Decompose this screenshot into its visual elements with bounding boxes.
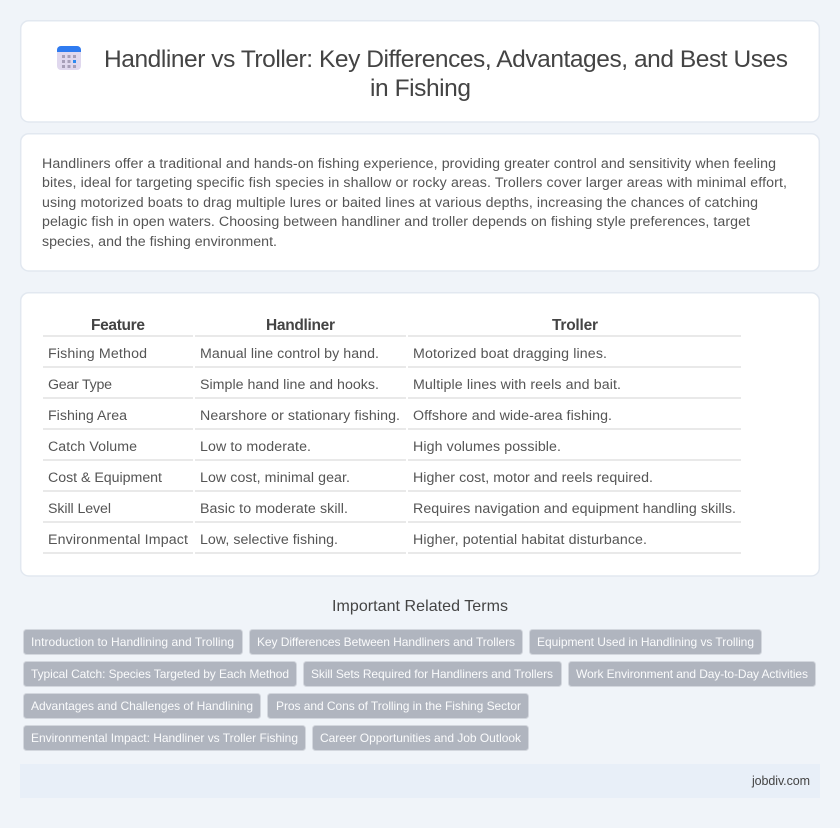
table row: environmental impact: Low, selective fishing. [200,532,338,548]
panel: related term tags: Environmental Impact: Handliner vs Troller Fishing [31,731,298,745]
table header: Troller [552,317,598,334]
table row: gear type [43,377,741,398]
table row: fishing area [43,408,741,429]
panel: related term tags: Introduction to Handlining and Trolling [31,635,234,649]
table row: gear type: Multiple lines with reels and bait. [413,377,621,393]
table row: cost and equipment [43,470,741,491]
text block: intro paragraph: using motorized boats to drag multiple lures or baited lines at various depths, increasing the chances of catching [42,195,758,211]
table row: environmental impact: Environmental Impact [48,532,188,548]
table row: catch volume: High volumes possible. [413,439,561,455]
panel: related term tags: Advantages and Challenges of Handlining [31,699,253,713]
panel: related term tags: Work Environment and Day-to-Day Activities [576,667,808,681]
panel: related term tags [24,630,816,750]
table row: gear type: Gear Type [48,377,112,393]
table row: fishing area: Fishing Area [48,408,127,424]
text block: intro paragraph: species, and the fishing environment. [42,234,277,250]
text block: intro paragraph: Handliners offer a traditional and hands-on fishing experience, providing greater control and sensitivity when feeling [42,156,776,172]
table row: cost and equipment: Low cost, minimal gear. [200,470,350,486]
panel: header [21,21,819,122]
table row: cost and equipment: Higher cost, motor and reels required. [413,470,653,486]
panel: related term tags: Career Opportunities and Job Outlook [320,731,522,745]
table row: fishing area: Nearshore or stationary fishing. [200,408,400,424]
table row: fishing method: Manual line control by hand. [200,346,379,362]
panel: related term tags: Pros and Cons of Trolling in the Fishing Sector [276,699,521,713]
table row: fishing area: Offshore and wide-area fishing. [413,408,612,424]
table row: fishing method [43,346,741,367]
title [104,46,788,102]
text block: intro paragraph: pelagic fish in open waters. Choosing between handliner and troller depends on fishing style preferences, target [42,214,750,230]
table row: catch volume: Low to moderate. [200,439,311,455]
panel: related term tags: Key Differences Between Handliners and Trollers [257,635,515,649]
table row: skill level: Requires navigation and equipment handling skills. [413,501,736,517]
table row: skill level [43,501,741,522]
table row: environmental impact: Higher, potential habitat disturbance. [413,532,647,548]
heading: important related terms: Important Related Terms [332,598,508,615]
panel: related term tags: Typical Catch: Species Targeted by Each Method [31,667,289,681]
table row: catch volume: Catch Volume [48,439,137,455]
table header: Handliner [266,317,335,334]
title: in Fishing [370,75,471,102]
title: Handliner vs Troller: Key Differences, Advantages, and Best Uses [104,46,788,73]
panel: related term tags: Skill Sets Required for Handliners and Trollers [311,667,553,681]
table row: catch volume [43,439,741,460]
table row: fishing method: Fishing Method [48,346,147,362]
text block: intro paragraph [42,156,787,250]
table row: cost and equipment: Cost & Equipment [48,470,162,486]
icon: calendar [57,46,81,70]
table row: gear type: Simple hand line and hooks. [200,377,379,393]
table header [43,317,741,336]
panel: comparison table [21,293,819,576]
panel: intro text [21,134,819,271]
panel: footer [20,764,820,798]
table row: environmental impact [43,532,741,553]
table row: skill level: Basic to moderate skill. [200,501,348,517]
footer source: jobdiv.com [751,774,810,788]
table header: Feature [91,317,145,334]
text block: intro paragraph: bites, ideal for targeting specific fish species in shallow or rocky areas. Trollers cover larger areas with minimal effort, [42,175,787,191]
table row: fishing method: Motorized boat dragging lines. [413,346,607,362]
panel: related term tags: Equipment Used in Handlining vs Trolling [537,635,754,649]
table row: skill level: Skill Level [48,501,111,517]
